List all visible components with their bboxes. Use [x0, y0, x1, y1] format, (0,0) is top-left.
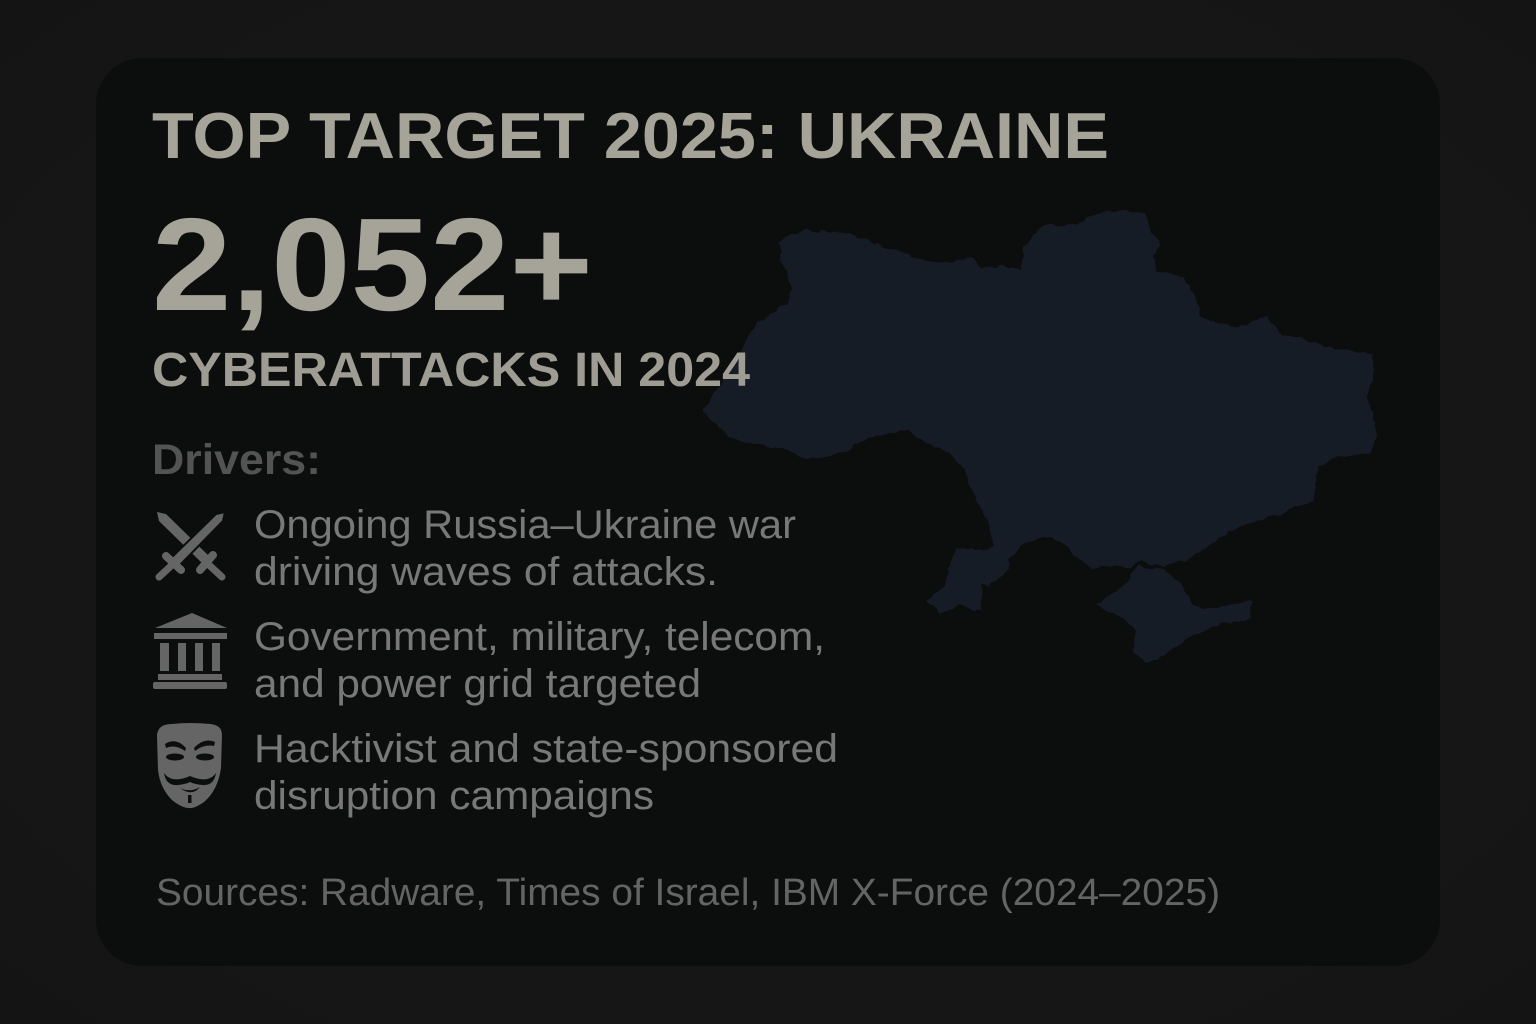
driver text 1: driving waves of attacks.	[254, 550, 718, 594]
driver text 2: and power grid targeted	[254, 662, 701, 706]
driver text 3: disruption campaigns	[254, 774, 654, 818]
driver text 3: Hacktivist and state-sponsored	[254, 727, 838, 771]
driver text 1	[254, 503, 796, 594]
map: Ukraine silhouette	[703, 210, 1377, 662]
driver text 3	[254, 727, 838, 818]
icon: government building	[153, 613, 227, 689]
big number: 2,052+	[152, 191, 593, 338]
icon: hacktivist mask	[157, 723, 222, 808]
driver text 2	[254, 615, 825, 706]
panel: main card	[96, 58, 1440, 966]
sources: Sources: Radware, Times of Israel, IBM X-Force (2024–2025)	[156, 872, 1220, 914]
driver text 1: Ongoing Russia–Ukraine war	[254, 503, 796, 547]
drivers heading: Drivers:	[152, 436, 321, 484]
driver text 2: Government, military, telecom,	[254, 615, 825, 659]
title: TOP TARGET 2025: UKRAINE	[152, 99, 1109, 172]
icon: crossed swords	[157, 512, 225, 577]
subheading: CYBERATTACKS IN 2024	[152, 344, 750, 397]
